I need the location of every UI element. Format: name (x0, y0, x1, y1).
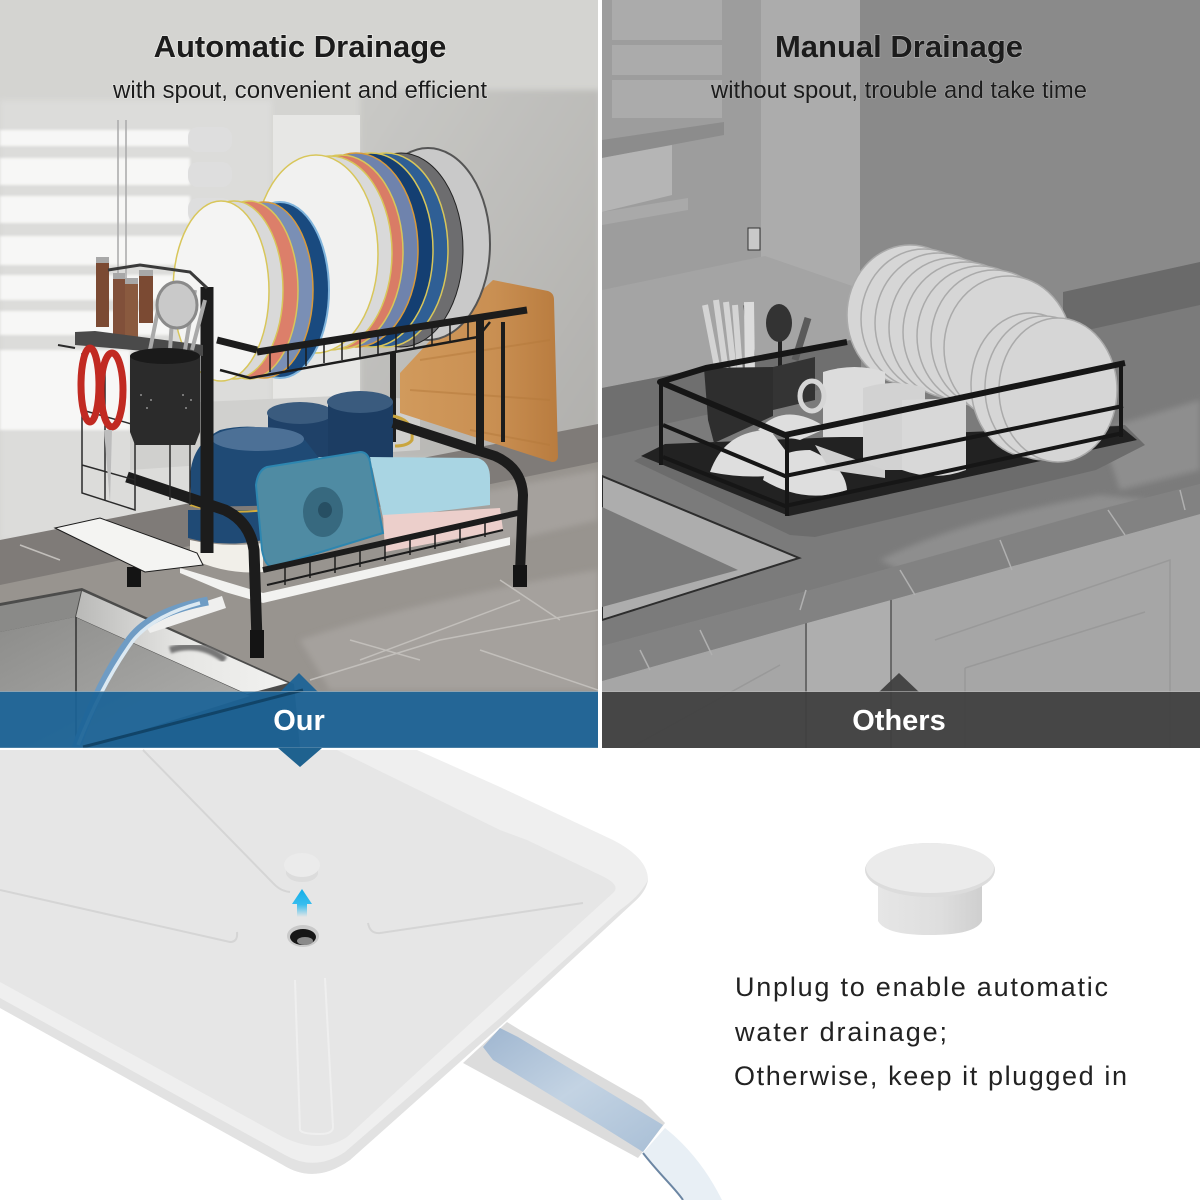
heading: Automatic Drainage (112, 29, 487, 104)
sill (602, 300, 849, 388)
black wire frame (660, 342, 1125, 516)
panel: tray underside close-up (0, 750, 722, 1200)
centre rib (295, 978, 333, 1134)
heading: Automatic Drainage: with spout, convenient and efficient (112, 77, 487, 104)
water stream (643, 1128, 722, 1200)
sink (0, 588, 290, 692)
rack feet (127, 565, 527, 658)
tray ribs (0, 750, 583, 942)
text block: plug instructions: Unplug to enable automatic (735, 972, 1108, 1002)
drain spout channel (463, 1022, 665, 1158)
panel: our automatic drainage rack scene (0, 0, 600, 748)
white tray body (0, 750, 648, 1174)
heading: Manual Drainage: without spout, trouble and take time (710, 77, 1087, 104)
text block: plug instructions (734, 972, 1127, 1091)
icon: white drain plug (865, 843, 995, 935)
lower rack frame (127, 287, 523, 640)
lower rack dishes (188, 391, 503, 572)
side tray (55, 518, 203, 572)
tray rim highlight (0, 880, 648, 1174)
side utensil holder with knives and scissors (58, 257, 207, 510)
cups and bowls (710, 367, 966, 496)
text block: plug instructions: water drainage; (734, 1017, 947, 1047)
backsplash (0, 424, 598, 590)
cutting board (400, 280, 558, 462)
wall column (761, 0, 860, 286)
greyscale sink (602, 476, 799, 620)
wall column and sill (130, 115, 420, 470)
grey tray (634, 425, 1145, 537)
upper rack frame (217, 310, 527, 448)
banner: Our: Our (273, 705, 325, 737)
icon: blue up arrow (292, 889, 312, 917)
backsplash (602, 262, 1200, 450)
window with blinds (0, 100, 272, 540)
countertop (0, 462, 598, 692)
heading: Manual Drainage: Manual Drainage (775, 29, 1023, 64)
greyscale window (602, 0, 761, 300)
drain hole (287, 925, 319, 947)
heading: Automatic Drainage: Automatic Drainage (154, 29, 446, 64)
text block: plug instructions: Otherwise, keep it plugged in (734, 1061, 1127, 1091)
tray inner floor (0, 750, 616, 1146)
counter edge (602, 484, 1200, 681)
utensil caddy (704, 300, 815, 443)
water spout stream (76, 596, 226, 748)
drain plug small (284, 853, 320, 882)
counter (602, 305, 1200, 646)
banner: Others: Others (852, 705, 946, 737)
white lower tray (180, 537, 510, 603)
white plates (847, 245, 1117, 462)
icon: banner pointer below Our (278, 748, 322, 767)
heading: Manual Drainage (710, 29, 1087, 104)
cabinets (602, 514, 1200, 692)
banner: Others (602, 673, 1200, 748)
plates upper (254, 148, 490, 353)
plates lower (173, 201, 329, 381)
panel: others manual drainage rack scene (602, 0, 1200, 748)
banner: Our (0, 673, 598, 748)
